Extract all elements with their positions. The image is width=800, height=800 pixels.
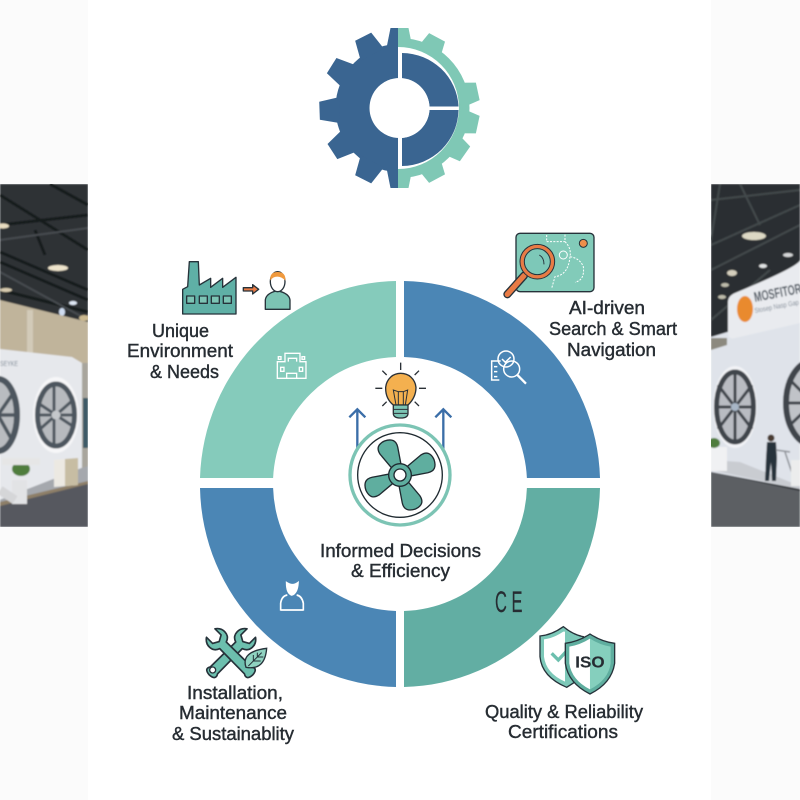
donut segment: bottom right: [404, 488, 600, 687]
label: unique environment: Unique: [152, 321, 209, 341]
icon: certification shields: ISO: [575, 654, 605, 671]
center label: & Efficiency: [351, 561, 450, 581]
donut segment: top left: [200, 281, 396, 478]
icon: factory and person: [183, 262, 290, 314]
icon: small building: [277, 353, 306, 378]
label: installation: Maintenance: [179, 703, 287, 723]
center label: [320, 541, 481, 581]
center label: Informed Decisions: [320, 541, 481, 561]
label: installation: & Sustainablity: [172, 724, 294, 744]
label: quality and reliability: [485, 702, 643, 742]
label: installation: [172, 683, 294, 744]
donut segment: top right: [404, 281, 600, 478]
label: ai-driven search: [549, 298, 677, 360]
arrow: left up: [349, 409, 365, 455]
photo: right exhibition booth: [708, 184, 800, 527]
donut segment: bottom left: [200, 488, 396, 687]
icon: wrenches and leaf: [202, 625, 267, 683]
label: unique environment: Environment: [127, 341, 233, 361]
photo: left exhibition booth: SEYKE: [0, 361, 18, 368]
label: installation: Installation,: [187, 683, 283, 703]
label: ai-driven search: Navigation: [567, 340, 656, 360]
label: unique environment: [127, 321, 233, 382]
icon: small document search: [492, 351, 526, 384]
label: unique environment: & Needs: [150, 362, 219, 382]
label: quality and reliability: Quality & Reliability: [485, 702, 643, 722]
icon: small person: [281, 583, 303, 611]
central white panel: [88, 0, 711, 800]
icon: map with magnifier: [507, 233, 594, 294]
arrow: right up: [435, 409, 451, 455]
icon: certification shields: [540, 627, 615, 694]
label: quality and reliability: Certifications: [508, 722, 618, 742]
label: ai-driven search: Search & Smart: [549, 319, 677, 339]
center hub: arrows, bulb and fan: [349, 363, 451, 525]
icon: lightbulb: [375, 363, 426, 418]
label: ai-driven search: AI-driven: [569, 298, 645, 318]
icon: CE mark: CE: [495, 586, 523, 619]
gear logo: [319, 28, 480, 188]
photo: left exhibition booth: [0, 184, 89, 527]
icon: fan: [350, 425, 450, 525]
